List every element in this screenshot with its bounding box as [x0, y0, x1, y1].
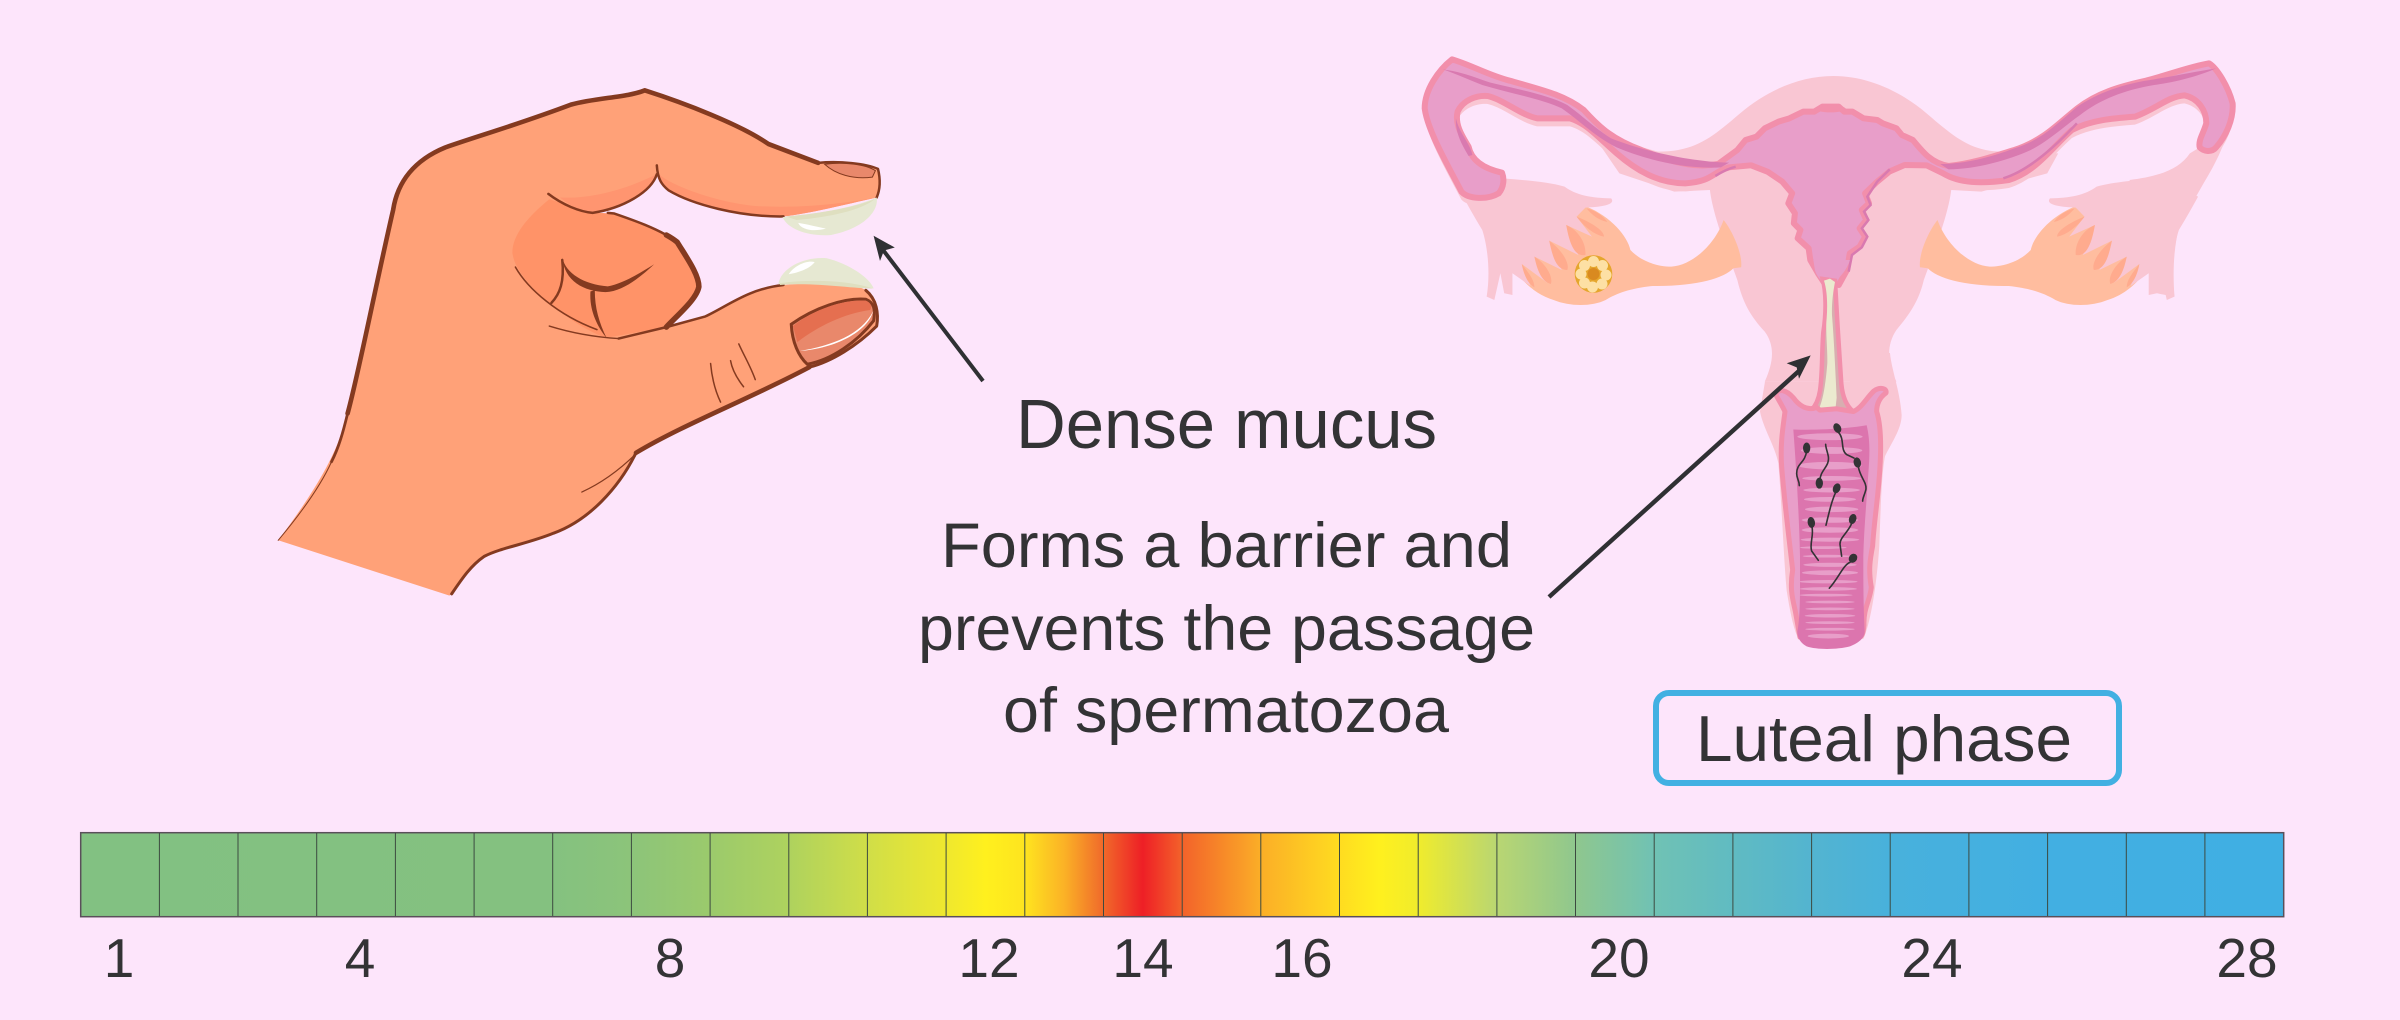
- icon: hand pinching mucus: [278, 90, 880, 596]
- curled finger creases: [562, 257, 654, 338]
- axis labels: cycle days: 28: [2216, 927, 2278, 989]
- fimbria pale hand shape: [1463, 178, 1612, 300]
- vaginal inner wall: [1793, 425, 1869, 649]
- hand silhouette: [278, 90, 880, 596]
- left ovary and fimbriae: [1463, 178, 1741, 305]
- axis labels: cycle days: 12: [958, 927, 1020, 989]
- axis labels: cycle days: 4: [345, 927, 375, 989]
- text block: barrier description: prevents the passage: [918, 594, 1535, 664]
- callout: luteal phase: [1656, 693, 2119, 783]
- callout: luteal phase: Luteal phase: [1696, 702, 2072, 775]
- upper mucus drop: [783, 197, 877, 235]
- arrow: to cervical canal: [1549, 355, 1811, 597]
- thumbnail: [791, 299, 874, 364]
- rugae ridges: [1797, 433, 1863, 638]
- axis labels: cycle days: 1: [104, 927, 134, 989]
- curled finger shading: [512, 199, 699, 338]
- darker stripes in tubes: [1443, 68, 2216, 169]
- axis labels: cycle days: 16: [1271, 927, 1333, 989]
- axis labels: cycle days: 20: [1588, 927, 1650, 989]
- axis labels: cycle days: 8: [655, 927, 685, 989]
- pale shadow beneath tubes: [1425, 67, 2233, 293]
- text block: barrier description: Forms a barrier and: [941, 511, 1512, 581]
- icon: female reproductive system: [1425, 59, 2233, 649]
- axis labels: cycle days: [104, 927, 2278, 989]
- hand outline strokes: [278, 90, 880, 594]
- right ovary and fimbriae: [1920, 130, 2228, 305]
- index fingernail: [825, 163, 875, 178]
- cervical canal with dense mucus: [1812, 260, 1853, 412]
- axis labels: cycle days: 24: [1901, 927, 1963, 989]
- spermatozoa: [1797, 422, 1866, 588]
- lower mucus drop: [778, 258, 874, 289]
- axis labels: cycle days: 14: [1112, 927, 1174, 989]
- darker cavity edges and fundus bump: [1715, 106, 2077, 272]
- follicle on left ovary: [1575, 255, 1612, 293]
- heading: dense mucus: Dense mucus: [1016, 385, 1437, 463]
- fimbria darker tips: [1522, 208, 1607, 287]
- text block: barrier description: [918, 511, 1535, 746]
- uterus and fallopian tubes: [1425, 59, 2233, 285]
- text block: barrier description: of spermatozoa: [1003, 676, 1450, 746]
- pale outer tissue, upper part: [1425, 67, 2233, 382]
- knuckle and finger underside shading: [560, 172, 877, 216]
- chart: 28-day cycle colour bar: [81, 833, 2284, 917]
- arrow: to dense mucus on fingers: [874, 236, 983, 381]
- vagina with rugae: [1776, 388, 1886, 649]
- pale outer tissue, lower part: [1760, 353, 1902, 639]
